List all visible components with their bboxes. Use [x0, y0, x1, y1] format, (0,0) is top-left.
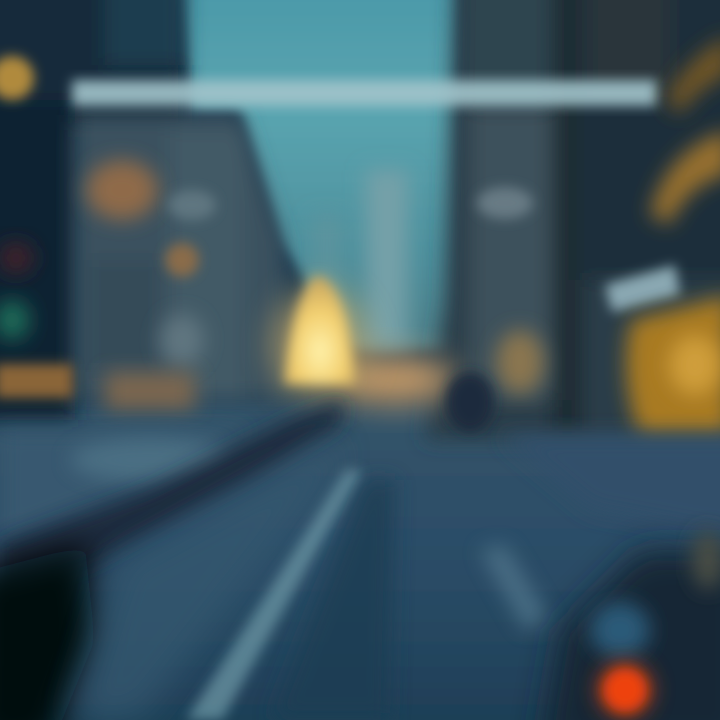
central orange horizon glow [335, 356, 455, 404]
sidewalk left [0, 430, 250, 540]
light: red [0, 242, 34, 274]
light: large yellow storefront [626, 295, 720, 435]
blue blob lower right [590, 602, 650, 658]
dark kerb wedge [0, 400, 345, 595]
light: orange window small [165, 243, 199, 277]
black corner [0, 545, 95, 720]
light: pale window right [477, 187, 533, 219]
light: low orange windows [105, 372, 195, 410]
title band [72, 80, 657, 106]
right buildings [425, 0, 720, 440]
left road light band [70, 440, 340, 720]
central yellow glow [284, 275, 356, 384]
pale pavement patch [70, 438, 230, 482]
light: pale window lower [160, 314, 204, 366]
road dark lane [270, 480, 395, 720]
right sidewalk [500, 435, 720, 540]
light: green [0, 300, 30, 340]
road stripe right [480, 545, 550, 630]
distant tower [312, 170, 408, 350]
light: yellow top left [0, 56, 34, 100]
light: bright storefront spot [669, 335, 720, 395]
light: orange windows [86, 160, 158, 220]
left dark tower [0, 0, 185, 420]
red light [603, 668, 647, 712]
central halo [272, 287, 368, 403]
light: pale window [168, 190, 216, 220]
road surface [0, 400, 720, 720]
red light halo [595, 660, 655, 720]
sky [180, 0, 460, 350]
light: orange right of street [496, 330, 544, 394]
light: orange sign top right [650, 130, 720, 225]
light: orange strip [0, 364, 73, 398]
left lights [0, 56, 216, 410]
light: white sign [605, 265, 680, 312]
light: orange upper corner [665, 35, 720, 115]
pedestrian silhouette [446, 372, 494, 432]
bottom right dark area [540, 550, 720, 720]
tan blob lower right [692, 530, 720, 590]
left mid building [75, 115, 290, 400]
road stripe centre [186, 470, 362, 720]
right lights [477, 35, 720, 435]
